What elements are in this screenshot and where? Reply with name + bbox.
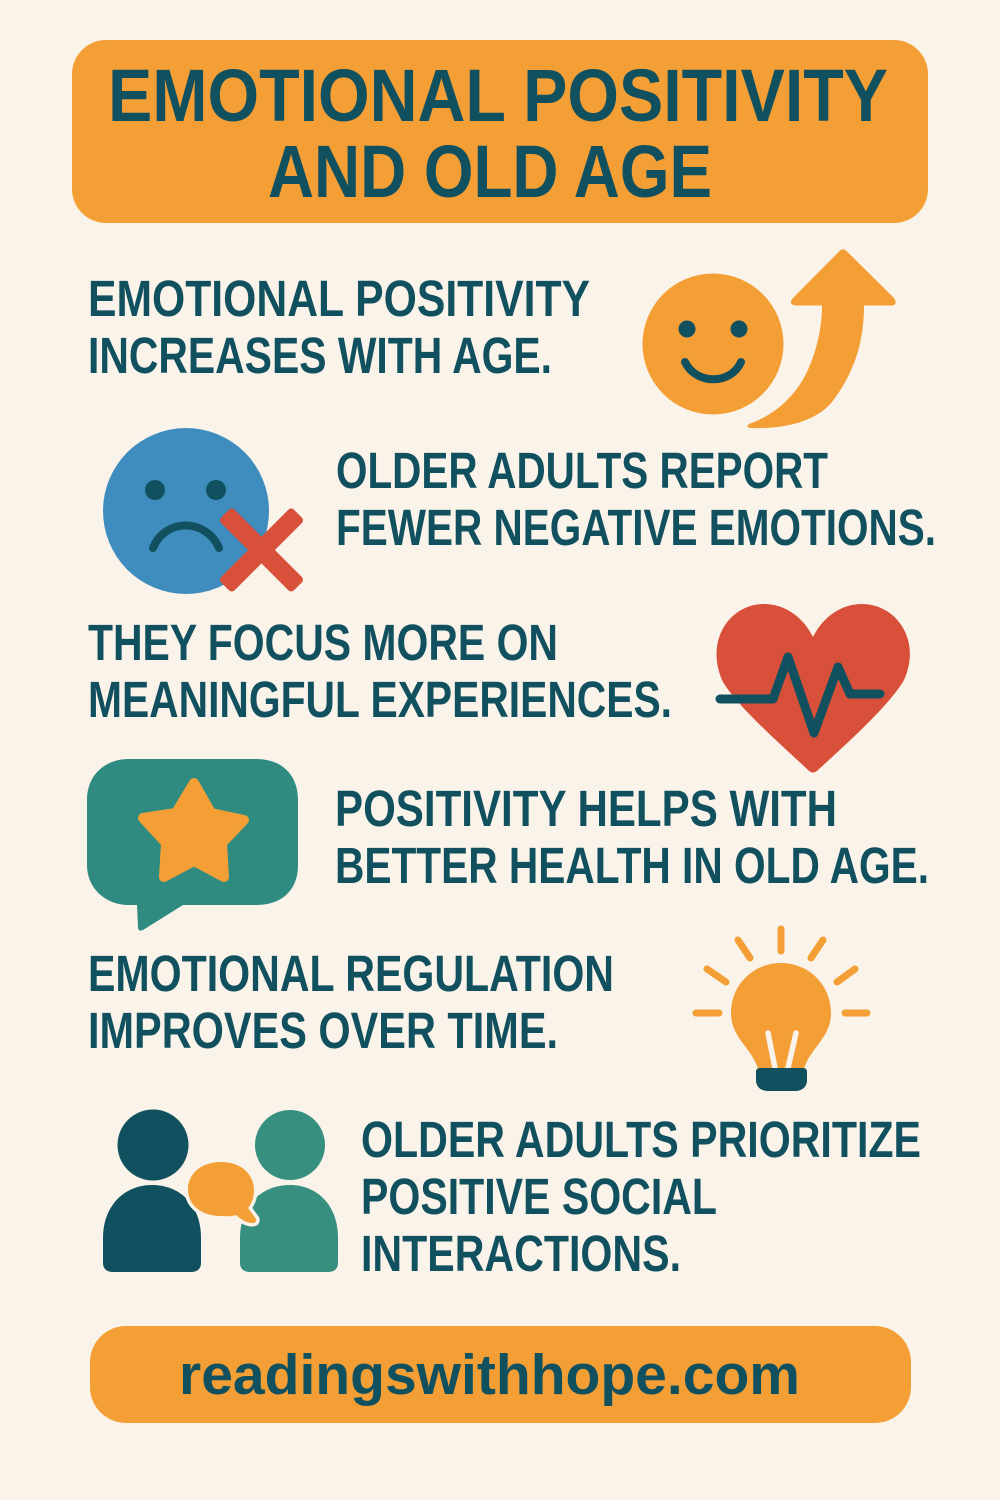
- footer banner: readingswithhope.com: [179, 1343, 800, 1407]
- icon: sad face with red cross: [103, 428, 305, 594]
- text: emotional regulation: IMPROVES OVER TIME.: [88, 1002, 558, 1059]
- icon: heart with pulse: [717, 604, 910, 772]
- text: emotional regulation: [88, 945, 614, 1059]
- text: emotional regulation: EMOTIONAL REGULATION: [88, 945, 614, 1002]
- text: positive social interactions: INTERACTIONS.: [361, 1225, 681, 1282]
- text: better health: POSITIVITY HELPS WITH: [335, 780, 837, 837]
- footer banner: [90, 1326, 911, 1423]
- text: meaningful experiences: [88, 614, 672, 728]
- text: fewer negative emotions: [336, 442, 936, 556]
- title banner: EMOTIONAL POSITIVITY: [108, 54, 888, 137]
- text: positive social interactions: POSITIVE SOCIAL: [361, 1168, 717, 1225]
- icon: light bulb: [696, 929, 867, 1091]
- icon: smiley with up arrow: [642, 249, 896, 428]
- text: emotional positivity increases: EMOTIONAL POSITIVITY: [88, 270, 590, 327]
- text: positive social interactions: [361, 1111, 921, 1282]
- icon: two people talking: [103, 1110, 338, 1272]
- title banner: [72, 40, 928, 223]
- text: emotional positivity increases: INCREASES WITH AGE.: [88, 327, 552, 384]
- text: better health: [335, 780, 929, 894]
- text: meaningful experiences: THEY FOCUS MORE ON: [88, 614, 558, 671]
- text: emotional positivity increases: [88, 270, 590, 384]
- text: fewer negative emotions: OLDER ADULTS REPORT: [336, 442, 828, 499]
- icon: speech bubble with star: [87, 759, 298, 931]
- title banner: AND OLD AGE: [268, 130, 712, 213]
- text: meaningful experiences: MEANINGFUL EXPERIENCES.: [88, 671, 672, 728]
